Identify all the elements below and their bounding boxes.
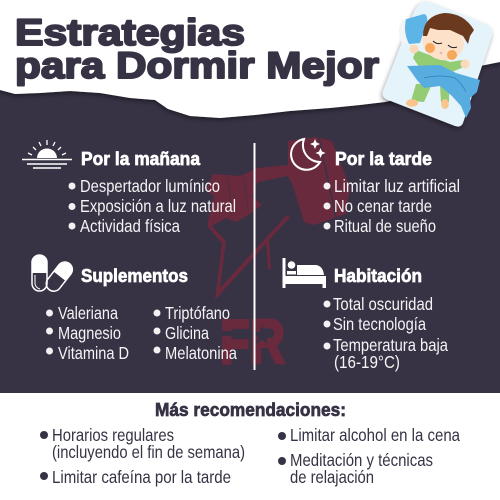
list xyxy=(334,176,460,236)
torso and arms xyxy=(413,50,466,72)
list xyxy=(58,303,237,363)
bullets xyxy=(324,300,330,350)
panel: por la tarde xyxy=(291,139,460,236)
vertical divider xyxy=(254,143,256,370)
heading: Suplementos xyxy=(81,265,188,286)
list: (16-19°C) xyxy=(334,352,400,372)
list xyxy=(52,425,460,487)
panel: por la mañana xyxy=(22,140,236,236)
list: No cenar tarde xyxy=(334,196,432,216)
list: Exposición a luz natural xyxy=(80,196,236,216)
watermark: FR letters: FR xyxy=(220,308,285,377)
pillow xyxy=(403,14,427,44)
list: Melatonina xyxy=(165,343,237,363)
list: Valeriana xyxy=(58,303,118,323)
list xyxy=(80,176,236,236)
list: Meditación y técnicas xyxy=(290,450,433,470)
list: Despertador lumínico xyxy=(80,176,220,196)
icon: sunrise xyxy=(22,140,72,168)
list: Limitar luz artificial xyxy=(334,176,460,196)
mattress xyxy=(383,2,492,127)
heading: Más recomendaciones: xyxy=(155,399,346,420)
bullets xyxy=(68,182,76,230)
list: Magnesio xyxy=(58,323,121,343)
panel: más recomendaciones xyxy=(40,399,460,487)
panel: suplementos xyxy=(32,255,237,363)
list: Limitar alcohol en la cena xyxy=(290,425,460,445)
bullets xyxy=(324,182,330,230)
icon: bed xyxy=(282,258,326,288)
legs xyxy=(411,84,432,102)
illustration: sleeping boy on bed xyxy=(383,2,492,127)
watermark: fist logo xyxy=(206,137,350,377)
heading: Por la tarde xyxy=(335,148,432,169)
cheeks xyxy=(425,43,435,53)
feet xyxy=(406,99,418,107)
list: de relajación xyxy=(290,467,374,487)
list: Vitamina D xyxy=(58,343,129,363)
face xyxy=(417,18,469,66)
list: Glicina xyxy=(165,323,209,343)
list xyxy=(333,294,448,372)
eyes and nose xyxy=(433,41,457,48)
title xyxy=(15,12,379,86)
header: white torn paper xyxy=(0,0,500,118)
panel: habitación xyxy=(282,258,448,372)
list: Triptófano xyxy=(165,303,230,323)
title: para Dormir Mejor xyxy=(15,45,379,86)
icon: capsules xyxy=(32,255,75,294)
blanket xyxy=(407,65,480,118)
list: Total oscuridad xyxy=(333,294,433,314)
list: Ritual de sueño xyxy=(334,216,436,236)
list: Temperatura baja xyxy=(333,335,448,355)
heading: Habitación xyxy=(334,265,422,286)
list: Limitar cafeína por la tarde xyxy=(52,467,231,487)
list: Actividad física xyxy=(80,216,180,236)
list: (incluyendo el fin de semana) xyxy=(52,442,245,462)
list: Horarios regulares xyxy=(52,425,174,445)
bullets xyxy=(46,310,160,354)
heading: Por la mañana xyxy=(81,148,201,169)
bullets xyxy=(40,431,286,480)
icon: moon and stars xyxy=(291,139,326,170)
title: Estrategias xyxy=(15,12,245,53)
dark background panel xyxy=(0,0,500,393)
list: Sin tecnología xyxy=(333,314,426,334)
hair xyxy=(423,13,474,44)
